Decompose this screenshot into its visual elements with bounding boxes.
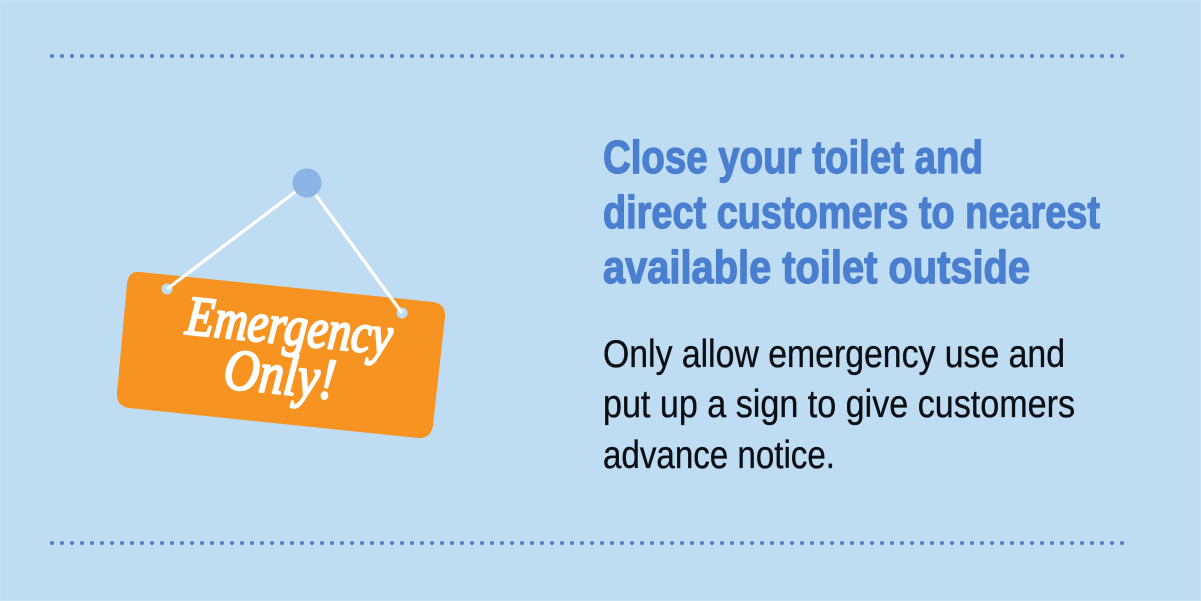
sign text: Emergency [182,285,396,368]
body text: Only allow emergency use and [603,333,1065,376]
heading: available toilet outside [603,241,1030,293]
nail [292,168,322,198]
body text: advance notice. [603,434,835,477]
hanging string [167,183,402,313]
heading: direct customers to nearest [603,186,1100,238]
eyelet right [396,308,408,318]
body text: put up a sign to give customers [603,383,1075,426]
sign board [117,272,445,438]
icon: hanging sign [117,168,445,438]
body text [603,333,1075,477]
sign text [177,285,396,417]
heading [603,131,1100,293]
eyelet left [162,284,172,294]
heading: Close your toilet and [603,131,983,183]
sign text: Only! [221,336,339,412]
